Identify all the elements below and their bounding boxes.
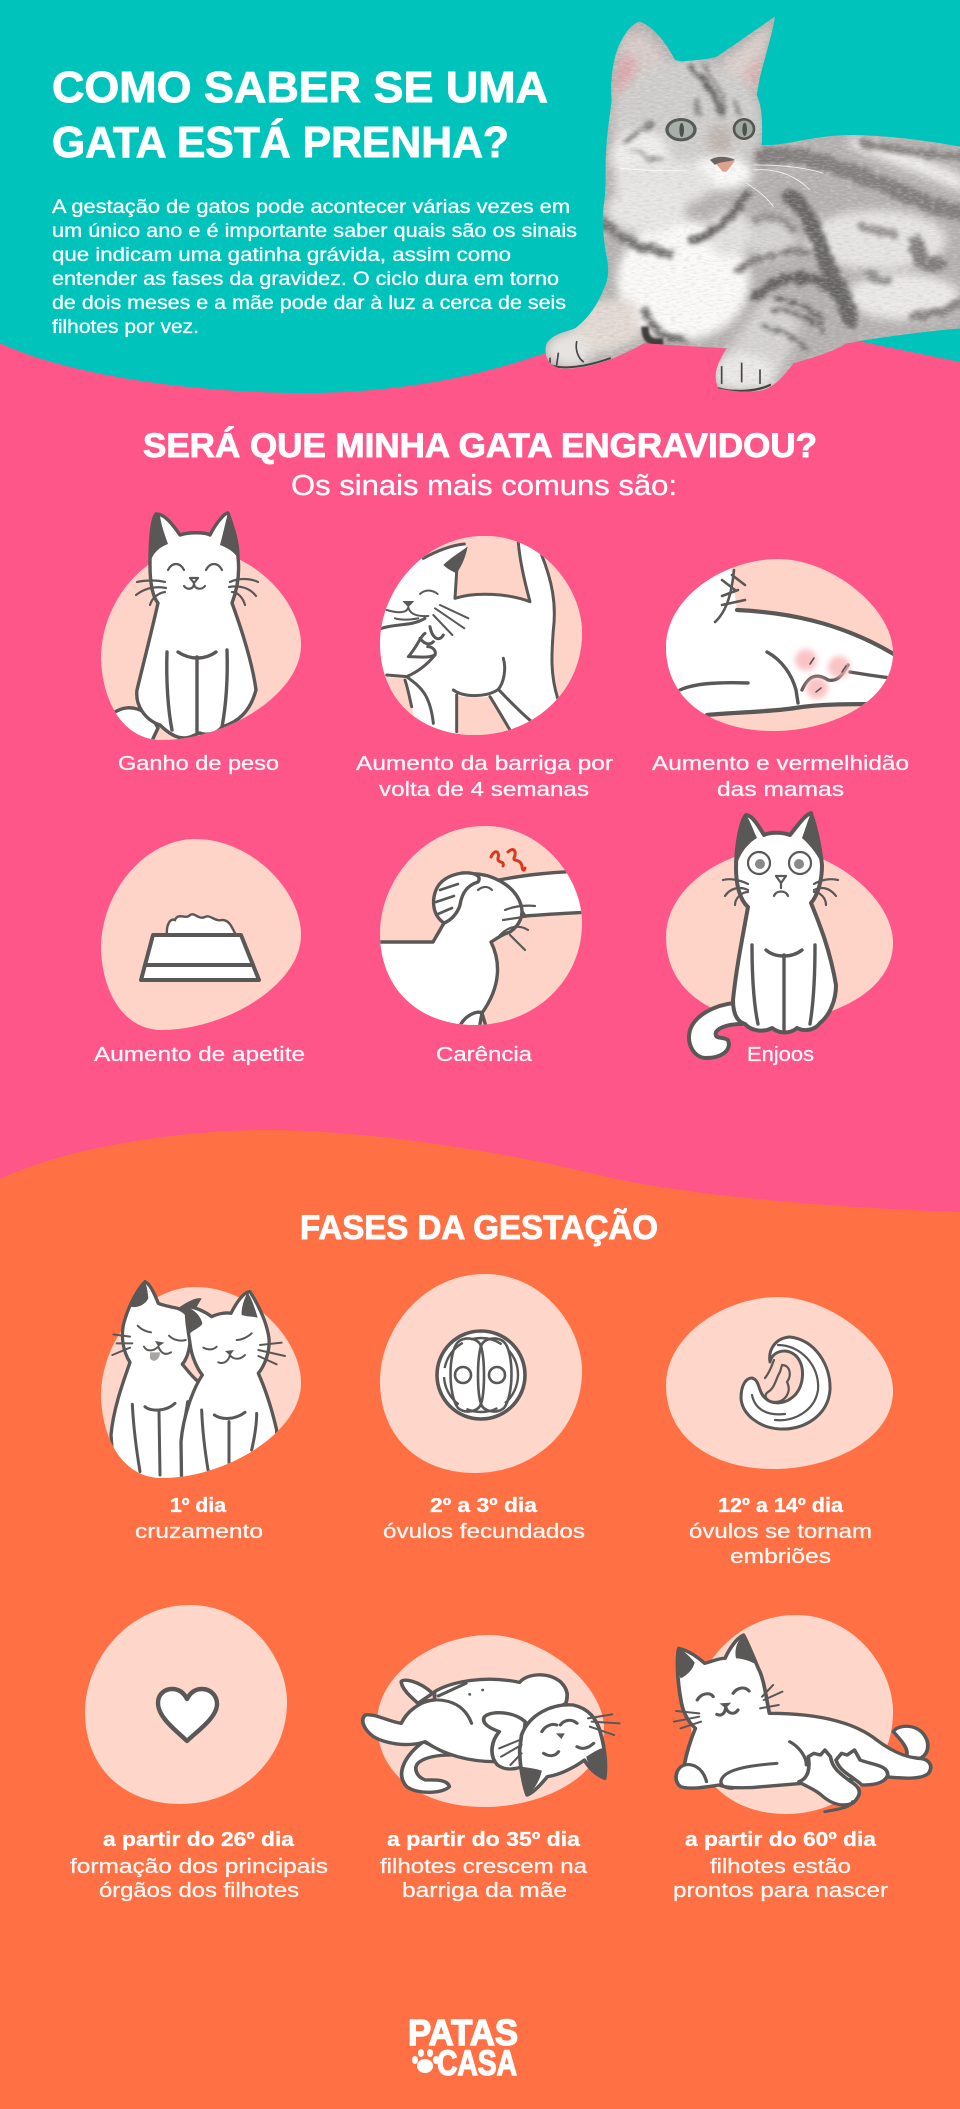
label: mamas <box>652 753 909 801</box>
panel: 12º a 14º dia <box>666 1297 893 1469</box>
shoulder stripes <box>790 197 850 320</box>
fur texture <box>580 10 960 397</box>
fur highlights <box>580 10 960 397</box>
icon: hand petting cat <box>380 848 582 1025</box>
label: 2º a 3º dia: óvulos fecundados <box>383 1521 585 1543</box>
heading: será que minha gata engravidou: SERÁ QUE MINHA GATA ENGRAVIDOU? <box>143 427 817 465</box>
leg stripes <box>777 300 823 320</box>
panel: 60º dia <box>674 1615 931 1814</box>
blob <box>380 1274 582 1473</box>
label: 12º a 14º dia: embriões <box>730 1546 831 1568</box>
ears <box>612 32 673 100</box>
head <box>612 60 762 187</box>
panel: mamas <box>660 555 900 731</box>
blob <box>380 536 582 735</box>
nose <box>713 161 735 172</box>
eyes <box>665 118 755 141</box>
title: GATA ESTÁ PRENHA? <box>52 117 509 167</box>
icon: heart <box>158 1689 217 1741</box>
label: mamas: das mamas <box>717 779 844 801</box>
label: aumento da barriga: volta de 4 semanas <box>379 779 589 801</box>
panel: 1º dia <box>101 1282 301 1488</box>
left arm <box>550 300 643 353</box>
back <box>763 155 960 213</box>
blob <box>666 1297 893 1469</box>
label: 60º dia <box>673 1829 888 1902</box>
heading: será que minha gata engravidou: Os sinais mais comuns são: <box>291 470 677 502</box>
blob <box>691 1615 893 1814</box>
whiskers <box>620 165 823 207</box>
toes <box>550 342 770 391</box>
label: aumento da barriga <box>356 753 613 801</box>
blob <box>380 826 582 1025</box>
blob <box>101 549 301 740</box>
label: 26º dia: formação dos principais <box>70 1856 328 1878</box>
background: orange section <box>0 1130 960 2109</box>
cat photo <box>545 10 960 397</box>
title <box>52 63 548 167</box>
icon: mother cat with kittens <box>674 1635 931 1812</box>
label: 2º a 3º dia <box>383 1495 585 1543</box>
label: 12º a 14º dia <box>689 1495 872 1568</box>
label: 35º dia: barriga da mãe <box>402 1880 567 1902</box>
icon: two cats <box>111 1282 285 1488</box>
blob <box>101 839 301 1030</box>
label: 60º dia: prontos para nascer <box>673 1880 888 1902</box>
label: carência: Carência <box>436 1044 533 1066</box>
label: 35º dia <box>380 1829 588 1902</box>
label: 1º dia: cruzamento <box>135 1521 263 1543</box>
background: teal header <box>0 0 960 420</box>
label: 1º dia: 1º dia <box>170 1495 227 1517</box>
intro text block: entender as fases da gravidez. O ciclo dura em torno <box>52 269 559 290</box>
label: aumento da barriga: Aumento da barriga por <box>356 753 613 775</box>
label: 12º a 14º dia: 12º a 14º dia <box>718 1495 844 1517</box>
blob <box>666 849 893 1021</box>
label: 12º a 14º dia: óvulos se tornam <box>689 1521 872 1543</box>
background: pink section <box>0 342 960 1300</box>
logo: patas da casa: PATAS <box>408 2012 518 2053</box>
blob <box>85 1605 287 1804</box>
label: 1º dia <box>135 1495 263 1543</box>
intro text block: filhotes por vez. <box>52 317 199 338</box>
blob <box>377 1635 604 1807</box>
label: enjoos: Enjoos <box>747 1044 814 1066</box>
label: 26º dia: a partir do 26º dia <box>103 1829 295 1851</box>
label: 60º dia: filhotes estão <box>710 1856 851 1878</box>
label: 2º a 3º dia: 2º a 3º dia <box>430 1495 538 1517</box>
label: ganho de peso: Ganho de peso <box>118 753 279 775</box>
title: COMO SABER SE UMA <box>52 63 548 112</box>
label: 26º dia <box>70 1829 328 1902</box>
heading: fases da gestação: FASES DA GESTAÇÃO <box>300 1209 658 1247</box>
panel: 35º dia <box>363 1635 620 1807</box>
panel: 2º a 3º dia <box>380 1274 582 1473</box>
intro text block: de dois meses e a mãe pode dar à luz a cerca de seis <box>52 293 566 314</box>
panel: 26º dia <box>85 1605 287 1804</box>
icon: sitting cat with tail <box>689 813 838 1058</box>
intro text block: um único ano e é importante saber quais são os sinais <box>52 221 577 242</box>
icon: cat belly <box>380 536 582 735</box>
label: apetite: Aumento de apetite <box>94 1044 305 1066</box>
label: 26º dia: órgãos dos filhotes <box>99 1880 299 1902</box>
icon: food bowl <box>141 914 259 980</box>
blob <box>101 1287 301 1478</box>
chest <box>617 220 750 340</box>
icon: embryo <box>741 1337 830 1429</box>
collars <box>605 223 670 253</box>
body light areas <box>807 210 947 270</box>
panel: enjoos <box>666 813 893 1058</box>
icon: cat belly with red nipples <box>666 568 893 717</box>
icon: cat lying on back <box>363 1675 620 1795</box>
logo: patas da casa <box>408 2012 518 2083</box>
panel: carência <box>380 826 582 1025</box>
panel: ganho de peso <box>101 513 301 745</box>
heading: será que minha gata engravidou <box>143 427 817 502</box>
label: 35º dia: filhotes crescem na <box>380 1856 588 1878</box>
forehead <box>690 67 722 113</box>
intro text block: A gestação de gatos pode acontecer várias vezes em <box>52 197 570 218</box>
panel: aumento da barriga <box>380 536 582 735</box>
intro text block <box>52 197 577 338</box>
panel: apetite <box>101 839 301 1030</box>
label: 60º dia: a partir do 60º dia <box>685 1829 877 1851</box>
icon: paw <box>412 2049 439 2073</box>
logo: patas da casa: CASA <box>437 2044 517 2083</box>
label: 35º dia: a partir do 35º dia <box>387 1829 581 1851</box>
dark under chest <box>645 327 663 342</box>
label: mamas: Aumento e vermelhidão <box>652 753 909 775</box>
icon: fertilized egg <box>437 1331 525 1419</box>
icon: sitting cat <box>112 513 258 745</box>
intro text block: que indicam uma gatinha grávida, assim como <box>52 245 511 266</box>
blob <box>666 559 893 731</box>
